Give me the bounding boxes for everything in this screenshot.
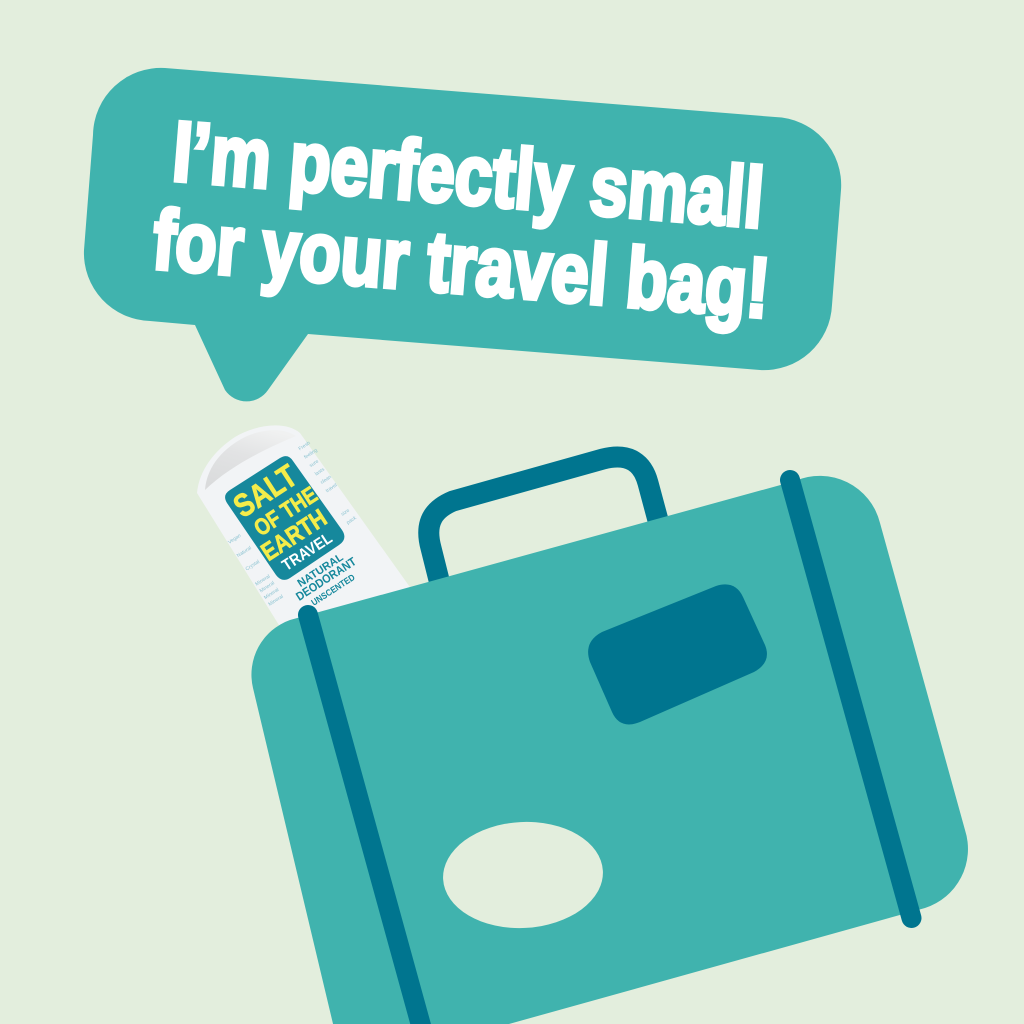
suitcase <box>251 457 968 1024</box>
left strap <box>308 615 425 1024</box>
speech bubble with headline <box>84 68 841 401</box>
label panel <box>225 456 344 580</box>
headline line 1: I’m perfectly small <box>169 104 767 246</box>
brand name: EARTH <box>256 504 332 567</box>
side ingredient text: Vegan <box>227 533 242 546</box>
brand name <box>225 453 336 567</box>
luggage tag <box>588 584 767 724</box>
headline line 2: for your travel bag! <box>149 192 773 337</box>
side ingredient text: Mineral <box>267 594 284 608</box>
product description: DEODORANT <box>293 554 359 604</box>
side ingredient text: sure <box>309 459 320 469</box>
side ingredient text: pack <box>346 515 358 526</box>
label text <box>205 439 389 628</box>
side ingredient text: clean <box>319 474 333 486</box>
side ingredient text: Mineral <box>259 580 276 594</box>
side ingredient text: Mineral <box>254 574 271 588</box>
side ingredient text: feeling <box>303 447 319 461</box>
product description: NATURAL <box>295 551 346 590</box>
side ingredient text: Crystal <box>245 559 261 572</box>
deodorant bottle <box>197 425 412 630</box>
side ingredient text <box>205 439 376 608</box>
right strap <box>790 480 912 918</box>
brand name: SALT <box>227 457 304 524</box>
side ingredient text: Mineral <box>263 587 280 601</box>
side ingredient text: travel <box>325 482 338 494</box>
suitcase body <box>251 476 968 1024</box>
side ingredient text: Natural <box>236 545 253 559</box>
side ingredient text: lasts <box>314 466 326 477</box>
speech bubble shape <box>84 68 841 401</box>
side ingredient text: Fresh <box>298 440 312 452</box>
product description: UNSCENTED <box>309 572 357 608</box>
bottle crystal dome <box>205 430 296 490</box>
suitcase handle <box>429 457 659 584</box>
travel word: TRAVEL <box>279 530 336 575</box>
bottle body <box>197 425 412 630</box>
oval sticker <box>440 818 606 932</box>
brand name: OF THE <box>249 481 322 541</box>
side ingredient text: size <box>340 508 351 518</box>
